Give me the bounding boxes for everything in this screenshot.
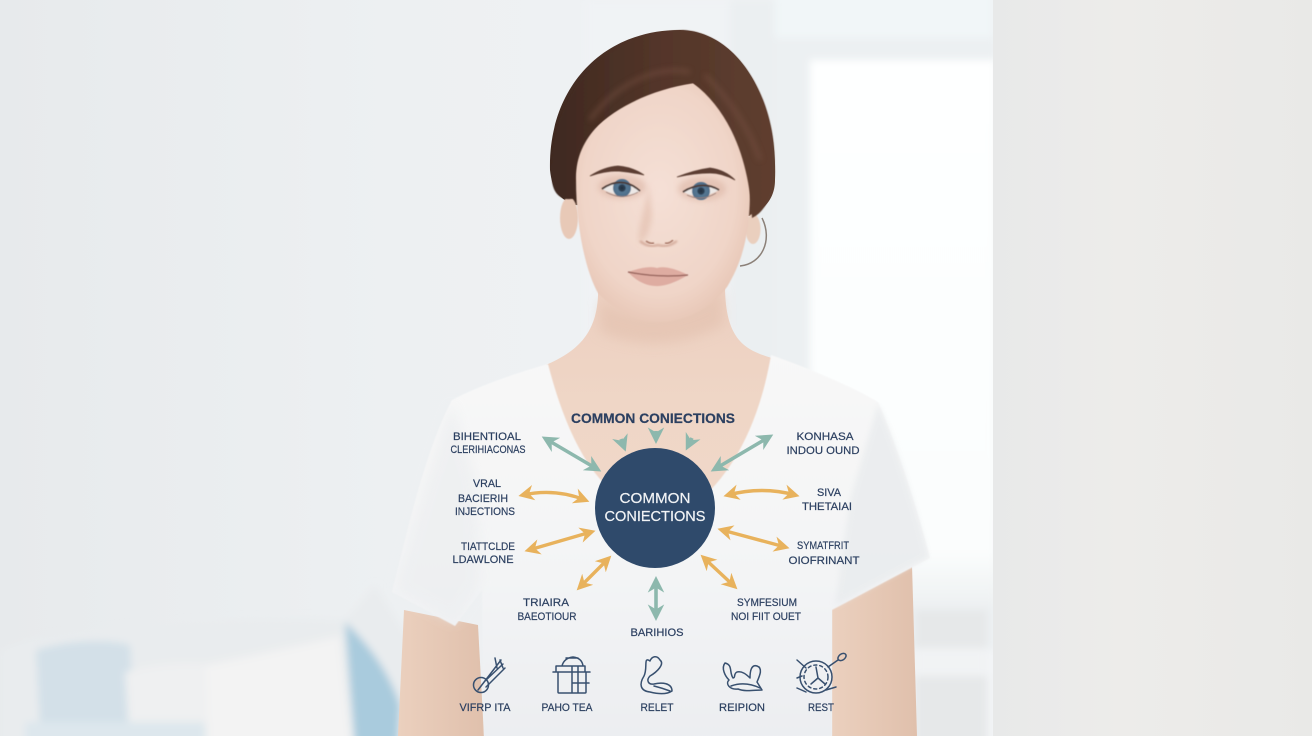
- mouth: [628, 267, 688, 286]
- ears: [560, 197, 760, 244]
- orange arrows: [523, 490, 795, 587]
- icon labels: [460, 702, 834, 714]
- label: bottom left: [518, 597, 577, 623]
- woman: hair back: [550, 30, 775, 216]
- label: middle left: BACIERIH: [458, 493, 508, 505]
- icon: relief figure: [641, 657, 672, 694]
- left eye: [602, 179, 640, 197]
- label: lower left: LDAWLONE: [452, 554, 514, 566]
- icon labels: REIPION: [719, 702, 765, 714]
- label: top right: KONHASA: [796, 431, 854, 443]
- hoop strand: [740, 218, 766, 266]
- label: top right: [786, 431, 860, 457]
- label: bottom center: BARIHIOS: [630, 627, 684, 639]
- icon: vegetable: [474, 658, 505, 692]
- woman: arms: [398, 565, 917, 736]
- nostrils: [646, 240, 673, 243]
- central circle: CONIECTIONS: [604, 509, 706, 525]
- label: middle left: INJECTIONS: [455, 506, 515, 518]
- label: lower right: SYMATFRIT: [797, 540, 849, 552]
- nose: [639, 185, 652, 243]
- central circle: [595, 448, 715, 568]
- icon row: [474, 652, 847, 694]
- label: lower right: [788, 540, 860, 567]
- label: bottom right: NOI FIIT OUET: [731, 611, 801, 623]
- label: bottom left: TRIAIRA: [523, 597, 570, 609]
- label: top left: BIHENTIOAL: [453, 431, 521, 443]
- white t-shirt: [392, 355, 930, 736]
- shirt shading: left sleeve: [395, 402, 480, 622]
- label: bottom right: SYMFESIUM: [737, 597, 797, 609]
- diagram title: COMMON CONIECTIONS: [571, 411, 735, 426]
- icon: reaction body: [723, 663, 762, 691]
- icon labels: PAHO TEA: [542, 702, 593, 714]
- face shape: [576, 83, 750, 322]
- central circle: COMMON: [620, 491, 690, 507]
- label: lower left: TIATTCLDE: [461, 541, 515, 553]
- icon labels: RELET: [640, 702, 674, 714]
- label: top left: [450, 431, 526, 456]
- icon: rest clock: [797, 652, 847, 693]
- label: lower right: OIOFRINANT: [788, 555, 860, 567]
- label: top left: CLERIHIACONAS: [450, 444, 526, 456]
- right eye: [683, 182, 719, 200]
- icon: tea pot: [553, 657, 590, 693]
- right eyebrow: [677, 168, 735, 180]
- sofa with pillows: [0, 585, 410, 736]
- teal arrows: [546, 431, 769, 616]
- icon labels: VIFRP ITA: [460, 702, 511, 714]
- neck shadow: [600, 290, 724, 343]
- label: bottom right: [731, 597, 801, 623]
- label: middle right: THETAIAI: [802, 501, 852, 513]
- diagram: common connections: [450, 411, 860, 639]
- woman: neck and chest: [546, 285, 772, 520]
- label: middle left: [455, 478, 515, 518]
- left eyebrow: [590, 166, 644, 176]
- shirt shading: right sleeve: [835, 404, 928, 606]
- label: top right: INDOU OUND: [786, 445, 860, 457]
- hair highlight: [590, 71, 760, 160]
- label: bottom left: BAEOTIOUR: [518, 611, 577, 623]
- label: middle right: SIVA: [817, 487, 842, 499]
- label: middle right: [802, 487, 852, 513]
- label: lower left: [452, 541, 515, 566]
- eye shadows: [598, 175, 726, 201]
- icon labels: REST: [808, 702, 834, 714]
- label: middle left: VRAL: [473, 478, 501, 490]
- hair front: [552, 30, 775, 218]
- woman: face: [552, 30, 775, 322]
